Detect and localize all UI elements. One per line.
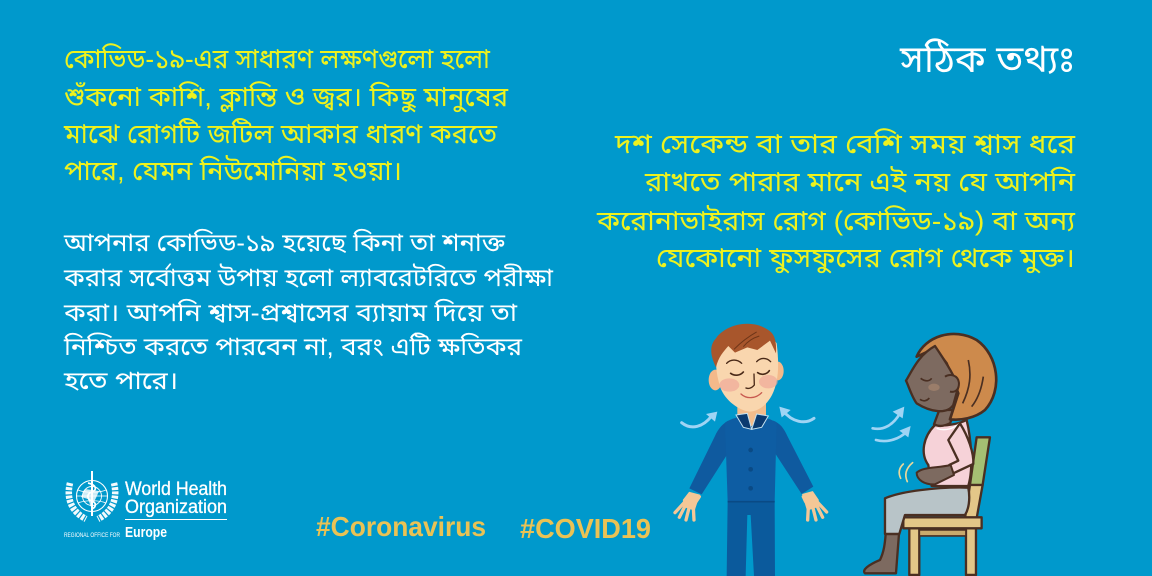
logo: World Health Organization wordmark bbox=[64, 479, 227, 541]
woman: hair bbox=[917, 334, 996, 420]
man: face bbox=[716, 335, 778, 412]
text block: holding your breath: দশ সেকেন্ড বা তার বেশি সময় শ্বাস ধরে bbox=[614, 128, 1076, 159]
illustration: man breathing bbox=[675, 324, 827, 576]
hashtag: Coronavirus: #Coronavirus bbox=[316, 511, 486, 542]
text block: common symptoms: পারে, যেমন নিউমোনিয়া হওয়া। bbox=[64, 155, 402, 186]
man: right arm bbox=[773, 421, 813, 494]
woman: face bbox=[906, 346, 958, 411]
text block: laboratory testing: আপনার কোভিড-১৯ হয়েছে কিনা তা শনাক্ত bbox=[63, 228, 506, 257]
illustration: woman breathing on chair bbox=[864, 334, 996, 575]
logo: World Health Organization wordmark: World Health bbox=[125, 479, 227, 500]
woman: neck bbox=[934, 410, 956, 426]
woman: torso bbox=[924, 420, 971, 486]
text block: holding your breath: যেকোনো ফুসফুসের রোগ থেকে মুক্ত। bbox=[656, 243, 1075, 274]
text block: holding your breath: রাখতে পারার মানে এই নয় যে আপনি bbox=[644, 166, 1076, 197]
woman: hand bbox=[917, 465, 954, 484]
man: hair bbox=[711, 324, 776, 367]
man: hands bbox=[675, 492, 827, 520]
woman: foot bbox=[864, 534, 899, 573]
man: jacket bbox=[725, 416, 777, 502]
man: neck bbox=[737, 400, 766, 427]
text block: common symptoms: মাঝে রোগটি জটিল আকার ধারণ করতে bbox=[63, 118, 498, 149]
icon: belly movement lines bbox=[899, 463, 913, 482]
woman: arm bbox=[948, 423, 973, 473]
man: ears bbox=[709, 370, 722, 390]
man: trousers bbox=[727, 501, 775, 576]
woman: facial features bbox=[920, 378, 932, 401]
man: left arm bbox=[689, 421, 729, 494]
heading: the facts: সঠিক তথ্যঃ bbox=[899, 37, 1075, 81]
arrows: breath toward man bbox=[682, 411, 814, 427]
text block: common symptoms bbox=[63, 43, 509, 186]
text block: common symptoms: কোভিড-১৯-এর সাধারণ লক্ষণগুলো হলো bbox=[64, 43, 491, 74]
hashtag: COVID19: #COVID19 bbox=[520, 513, 651, 544]
man: facial features bbox=[727, 358, 771, 398]
logo: World Health Organization wordmark: REGIONAL OFFICE FOR bbox=[64, 532, 120, 539]
arrows: breath at woman's mouth bbox=[873, 407, 911, 441]
text block: laboratory testing: হতে পারে। bbox=[63, 367, 178, 395]
woman: legs bbox=[885, 488, 969, 534]
logo: World Health Organization wordmark: Europe bbox=[125, 525, 167, 541]
text block: common symptoms: শুঁকনো কাশি, ক্লান্তি ও জ্বর। কিছু মানুষের bbox=[64, 81, 509, 114]
text block: laboratory testing: করার সর্বোত্তম উপায় হলো ল্যাবরেটরিতে পরীক্ষা bbox=[63, 262, 553, 292]
logo: World Health Organization emblem bbox=[69, 471, 115, 519]
text block: holding your breath bbox=[596, 128, 1076, 274]
text block: holding your breath: করোনাভাইরাস রোগ (কোভিড-১৯) বা অন্য bbox=[596, 205, 1076, 236]
man: collar bbox=[736, 413, 768, 429]
text block: laboratory testing: নিশ্চিত করতে পারবেন না, বরং এটি ক্ষতিকর bbox=[63, 332, 523, 361]
text block: laboratory testing bbox=[63, 228, 553, 395]
chair bbox=[970, 437, 990, 485]
logo: World Health Organization wordmark: Organization bbox=[125, 497, 227, 518]
text block: laboratory testing: করা। আপনি শ্বাস-প্রশ্বাসের ব্যায়াম দিয়ে তা bbox=[63, 298, 517, 327]
